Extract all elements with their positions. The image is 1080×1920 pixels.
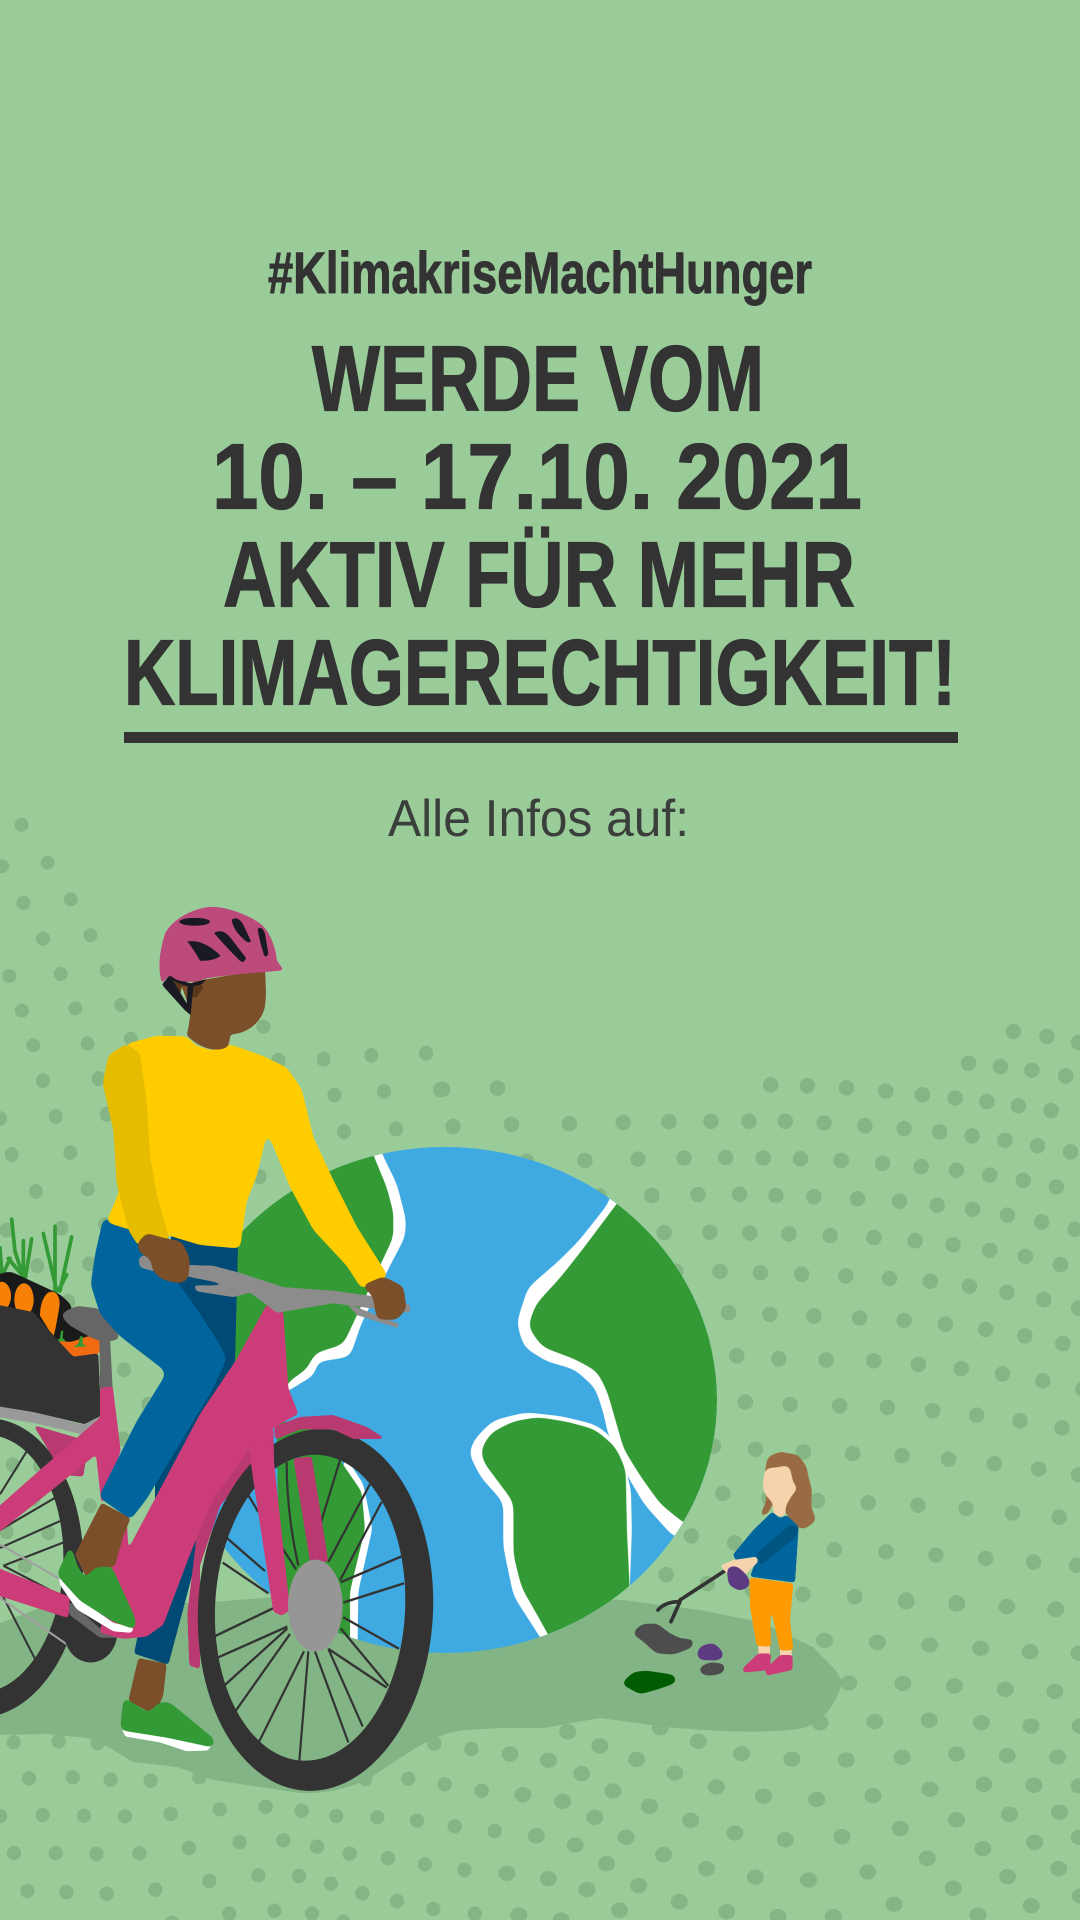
far sleeve shade — [103, 1044, 170, 1246]
boots — [743, 1653, 771, 1673]
hair — [757, 1452, 817, 1530]
helmet vents — [179, 918, 268, 962]
tomatoes — [53, 1335, 100, 1360]
front mudguard — [274, 1415, 386, 1440]
chain stay — [0, 1567, 70, 1618]
grabber — [658, 1571, 725, 1622]
rear fender behind front wheel — [187, 1447, 253, 1669]
cyclist on cargo bike — [0, 907, 442, 1797]
sweater — [733, 1512, 799, 1583]
near leg and shoe — [57, 1218, 227, 1633]
globe: ocean — [173, 1147, 717, 1653]
basket back — [0, 1271, 98, 1355]
carrot greens — [0, 1219, 72, 1291]
helmet — [159, 907, 284, 984]
globe: continents — [200, 1130, 750, 1654]
hands — [137, 1233, 190, 1284]
rack — [0, 1405, 102, 1435]
rear rack stay — [33, 1425, 86, 1477]
heading line 1: WERDE VOM — [312, 326, 764, 430]
basket front — [0, 1303, 101, 1425]
far leg — [120, 1218, 238, 1751]
rear wheel — [0, 1413, 91, 1723]
bike frame — [0, 1305, 386, 1662]
rider upper body — [103, 907, 411, 1328]
legs — [758, 1645, 792, 1656]
litter bag — [727, 1566, 751, 1591]
basket with carrots — [0, 1219, 122, 1435]
handlebar — [138, 1253, 411, 1313]
child picking up litter — [621, 1452, 817, 1694]
globe — [212, 1147, 717, 1653]
front fork — [293, 1456, 328, 1562]
jersey — [106, 1036, 388, 1289]
main frame — [100, 1305, 298, 1639]
hub — [288, 1560, 343, 1651]
info text: Alle Infos auf: — [388, 790, 689, 848]
face — [763, 1465, 799, 1517]
crank and chainring — [64, 1602, 117, 1662]
neck and head — [187, 969, 266, 1050]
front wheel — [189, 1423, 442, 1797]
helmet strap — [162, 975, 207, 1015]
heading line 3: AKTIV FÜR MEHR — [223, 522, 855, 626]
ear shadow — [173, 982, 203, 998]
litter — [632, 1623, 695, 1655]
hands — [720, 1557, 758, 1577]
carrots — [0, 1282, 60, 1337]
ground shadow — [0, 1595, 842, 1793]
seat tube and top tube — [0, 1386, 121, 1534]
hashtag: #KlimakriseMachtHunger — [268, 241, 812, 306]
dotted background pattern — [0, 825, 1080, 1920]
heading line 2: dates: 10. – 17.10. 2021 — [212, 424, 862, 528]
heading underline — [124, 732, 958, 743]
saddle — [60, 1306, 122, 1342]
